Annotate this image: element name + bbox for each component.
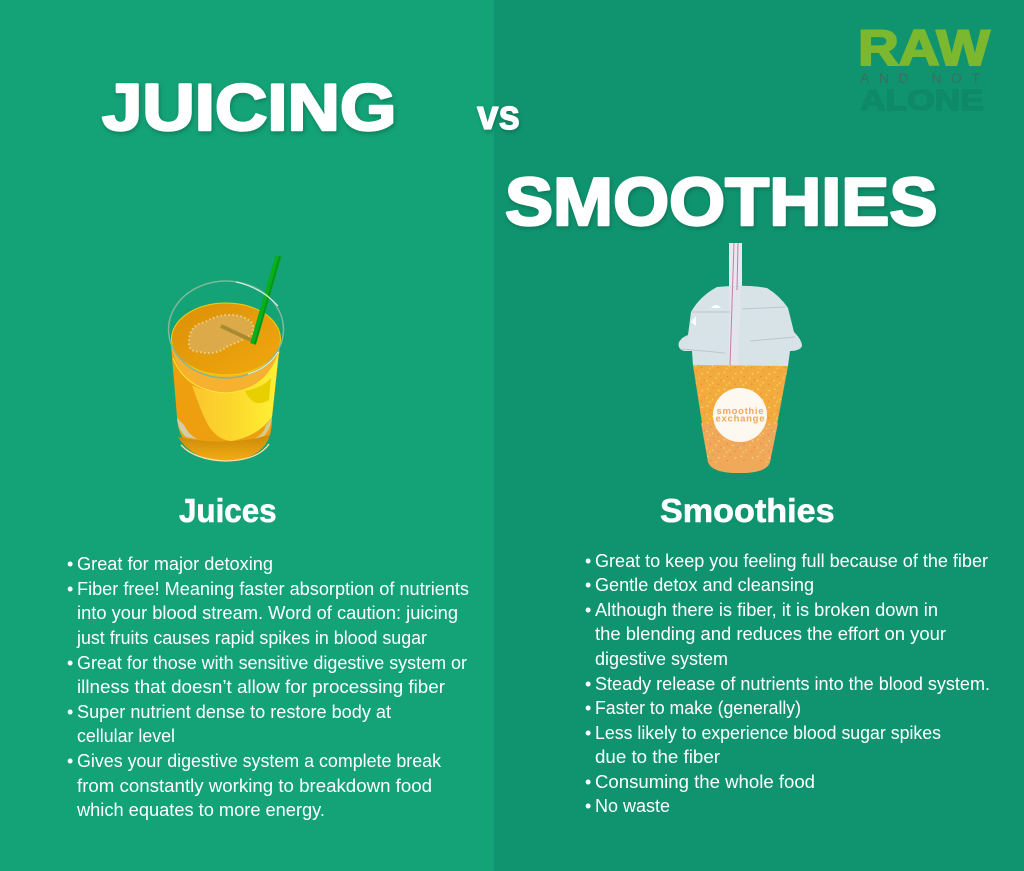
text block: juices list: cellular level [77,726,175,746]
icon: juice glass [168,256,284,461]
text block: juices list: from constantly working to breakdown food [77,776,432,796]
text block: smoothies list: • [585,698,591,718]
text block: smoothies list: • [585,551,591,571]
text block: smoothies list [585,551,990,816]
text block: smoothies list: Less likely to experience blood sugar spikes [595,723,941,743]
text block: juices list: • [67,751,73,771]
text block: juices list: into your blood stream. Word of caution: juicing [77,603,458,623]
text block: smoothies list: Steady release of nutrients into the blood system. [595,674,990,694]
text block: juices list: • [67,579,73,599]
text block: smoothies list: Although there is fiber, it is broken down in [595,600,938,620]
cup label [713,388,767,442]
text block: smoothies list: • [585,575,591,595]
panel: juices background [0,0,494,871]
logo: raw and not alone: RAW [858,21,990,76]
text block: juices list: Fiber free! Meaning faster absorption of nutrients [77,579,469,599]
heading: juices: Juices [179,492,277,529]
text block: smoothies list: digestive system [595,649,728,669]
title: vs: vs [477,90,520,138]
text block: smoothies list: • [585,772,591,792]
title: smoothies: SMOOTHIES [505,164,937,240]
text block: juices list: Super nutrient dense to restore body at [77,702,391,722]
logo: raw and not alone: ALONE [860,84,984,116]
text block: juices list: illness that doesn’t allow for processing fiber [77,677,445,697]
text block: smoothies list: • [585,674,591,694]
icon: smoothie cup [679,243,802,473]
text block: juices list [67,554,469,820]
heading: smoothies: Smoothies [660,494,835,530]
text block: smoothies list: due to the fiber [595,747,720,767]
text block: juices list: which equates to more energy. [76,800,325,820]
text block: smoothies list: • [585,796,591,816]
text block: smoothies list: the blending and reduces the effort on your [595,624,946,644]
text block: smoothies list: Great to keep you feeling full because of the fiber [595,551,988,571]
text block: smoothies list: No waste [595,796,670,816]
text block: smoothies list: Gentle detox and cleansing [595,575,814,595]
text block: juices list: • [67,702,73,722]
logo: raw and not alone: AND NOT [860,70,980,86]
cup label: smoothie [716,406,764,417]
text block: smoothies list: Faster to make (generally) [595,698,801,718]
panel: smoothies background [494,0,1024,871]
text block: juices list: • [67,554,73,574]
text block: smoothies list: • [585,600,591,620]
logo: raw and not alone [858,21,990,116]
cup label: exchange [716,414,764,424]
title: juicing: JUICING [102,70,396,144]
text block: juices list: just fruits causes rapid spikes in blood sugar [76,628,427,648]
text block: smoothies list: Consuming the whole food [595,772,815,792]
text block: juices list: Gives your digestive system a complete break [77,751,442,771]
text block: juices list: Great for those with sensitive digestive system or [77,653,467,673]
text block: juices list: Great for major detoxing [77,554,273,574]
text block: juices list: • [67,653,73,673]
text block: smoothies list: • [585,723,591,743]
